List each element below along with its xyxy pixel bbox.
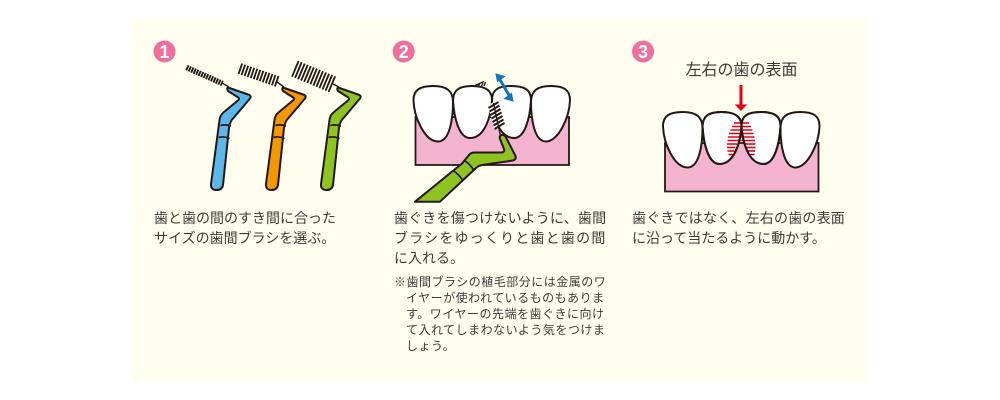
icon: step 3 badge: 3	[638, 42, 648, 62]
icon: green brush, thick	[294, 68, 361, 190]
icon: step 3 badge	[632, 40, 654, 62]
note: step 2	[394, 275, 606, 353]
text: step 2: に入れる。	[394, 250, 464, 266]
icon: step 1 badge: 1	[159, 42, 170, 62]
brush tip behind teeth	[475, 82, 486, 87]
note: step 2: ※歯間ブラシの植毛部分には金属のワ	[394, 275, 606, 289]
text: step 2: ブラシをゆっくりと歯と歯の間	[394, 230, 607, 246]
icon: step 2 badge	[393, 40, 415, 62]
text: step 1: 歯と歯の間のすき間に合った	[154, 210, 336, 226]
note: step 2: しょう。	[406, 339, 455, 353]
icon: blue brush, thin	[186, 68, 251, 190]
tooth outlines over hatching	[702, 112, 780, 164]
gum: step 3	[665, 143, 818, 192]
text: step 3: 歯ぐきではなく、左右の歯の表面	[632, 210, 845, 226]
text: step 1	[154, 210, 336, 246]
note: step 2: イヤーが使われているものもありま	[406, 291, 605, 305]
icon: step 1 badge	[154, 40, 176, 62]
panel: background	[132, 18, 868, 381]
icon: red down arrow	[735, 85, 747, 111]
icon: step 2 badge: 2	[399, 42, 409, 62]
note: step 2: て入れてしまわないよう気をつけま	[406, 323, 605, 337]
hatching: brushed tooth surfaces	[727, 123, 756, 154]
label: tooth surfaces: 左右の歯の表面	[685, 61, 798, 79]
icon: blue double arrow	[496, 74, 513, 101]
note: step 2: す。ワイヤーの先端を歯ぐきに向け	[406, 307, 604, 321]
text: step 2	[394, 210, 607, 266]
teeth: step 3	[663, 112, 820, 168]
text: step 2: 歯ぐきを傷つけないように、歯間	[394, 210, 606, 226]
icon: brush inserted between teeth	[415, 100, 516, 202]
text: step 3: に沿って当たるように動かす。	[632, 230, 826, 246]
text: step 3	[632, 210, 845, 246]
teeth: step 2	[414, 86, 570, 142]
gum: step 2	[416, 117, 569, 165]
icon: orange brush, medium	[240, 68, 306, 190]
text: step 1: サイズの歯間ブラシを選ぶ。	[154, 230, 335, 246]
